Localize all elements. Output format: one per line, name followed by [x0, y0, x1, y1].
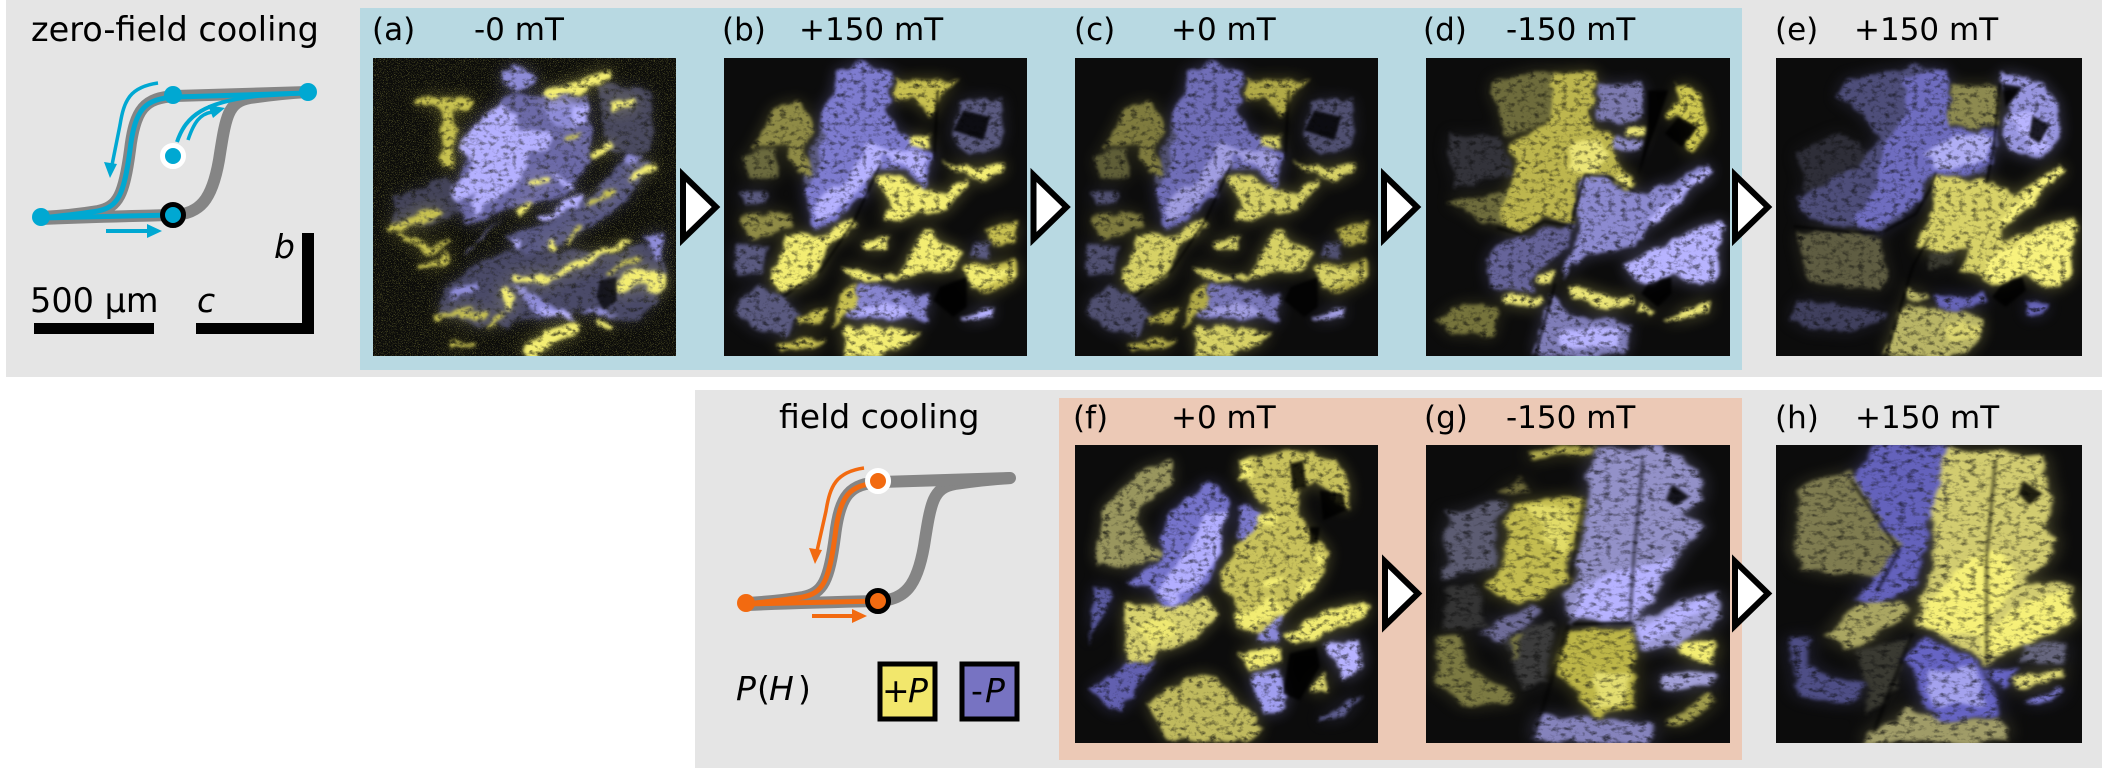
legend: P(H) with +P and -P boxes: ) — [798, 669, 811, 708]
label: (f) +0 mT — [1073, 400, 1277, 436]
image (e): domain map at +150 mT — [1776, 58, 2082, 356]
arrow: b to c — [1034, 175, 1066, 239]
arrow: c to d — [1384, 175, 1417, 239]
icon: zero-field cooling hysteresis loop — [32, 83, 317, 238]
label: (g) -150 mT: -150 mT — [1506, 400, 1636, 436]
image (f): field cooled domain map at +0 mT — [1075, 445, 1378, 743]
legend: P(H) with +P and -P boxes: + — [882, 671, 910, 710]
label: (d) -150 mT: -150 mT — [1506, 12, 1636, 48]
image (a): domain map at -0 mT — [373, 58, 676, 356]
legend: P(H) with +P and -P boxes: - — [971, 671, 983, 710]
label: (d) -150 mT — [1423, 12, 1636, 48]
panel: zero-field cooling background — [6, 0, 2102, 377]
label: (e) +150 mT: +150 mT — [1854, 12, 1999, 48]
label: (a) -0 mT — [372, 12, 565, 48]
label: (a) -0 mT: (a) — [372, 12, 415, 48]
label: (g) -150 mT: (g) — [1424, 400, 1468, 436]
panel: blue highlight for images a to d — [360, 8, 1742, 370]
label: (b) +150 mT: +150 mT — [799, 12, 944, 48]
label: (e) +150 mT — [1775, 12, 1999, 48]
label: (b) +150 mT — [722, 12, 944, 48]
label: (g) -150 mT — [1424, 400, 1636, 436]
label: (h) +150 mT — [1775, 400, 2000, 436]
axes: c and b crystal directions: c — [197, 281, 215, 320]
image (d): domain map at -150 mT — [1426, 58, 1730, 356]
image (b): domain map at +150 mT — [724, 58, 1027, 356]
image (c): domain map at +0 mT — [1075, 58, 1378, 356]
legend: P(H) with +P and -P boxes — [736, 664, 1017, 719]
legend: P(H) with +P and -P boxes: P — [908, 671, 928, 710]
axes: c and b crystal directions — [196, 227, 314, 334]
legend: P(H) with +P and -P boxes: P — [985, 671, 1005, 710]
label: (b) +150 mT: (b) — [722, 12, 766, 48]
label: (h) +150 mT: +150 mT — [1855, 400, 2000, 436]
legend: P(H) with +P and -P boxes: H — [769, 669, 794, 708]
legend: P(H) with +P and -P boxes: ( — [757, 669, 770, 708]
panel: field cooling background — [695, 390, 2102, 768]
label: (c) +0 mT — [1074, 12, 1277, 48]
label: (a) -0 mT: -0 mT — [474, 12, 565, 48]
image (g): field cooled domain map at -150 mT — [1426, 445, 1730, 743]
panel: orange highlight for images f and g — [1059, 398, 1742, 760]
heading: zero-field cooling: zero-field cooling — [31, 10, 319, 49]
label: (f) +0 mT: +0 mT — [1171, 400, 1277, 436]
label: (d) -150 mT: (d) — [1423, 12, 1467, 48]
arrow: a to b — [683, 175, 716, 239]
arrow: f to g — [1385, 562, 1418, 626]
icon: field cooling hysteresis loop — [737, 468, 1011, 623]
image (h): field cooled domain map at +150 mT — [1776, 445, 2082, 743]
axes: c and b crystal directions: b — [274, 227, 295, 266]
label: (c) +0 mT: (c) — [1074, 12, 1115, 48]
heading: field cooling: field cooling — [779, 397, 979, 436]
label: (c) +0 mT: +0 mT — [1171, 12, 1277, 48]
arrow: g to h — [1735, 562, 1768, 626]
label: (f) +0 mT: (f) — [1073, 400, 1108, 436]
label: (e) +150 mT: (e) — [1775, 12, 1818, 48]
legend: P(H) with +P and -P boxes: P — [736, 669, 756, 708]
scale bar: 500 µm: 500 µm — [30, 281, 159, 320]
arrow: d to e — [1735, 175, 1768, 239]
label: (h) +150 mT: (h) — [1775, 400, 1819, 436]
